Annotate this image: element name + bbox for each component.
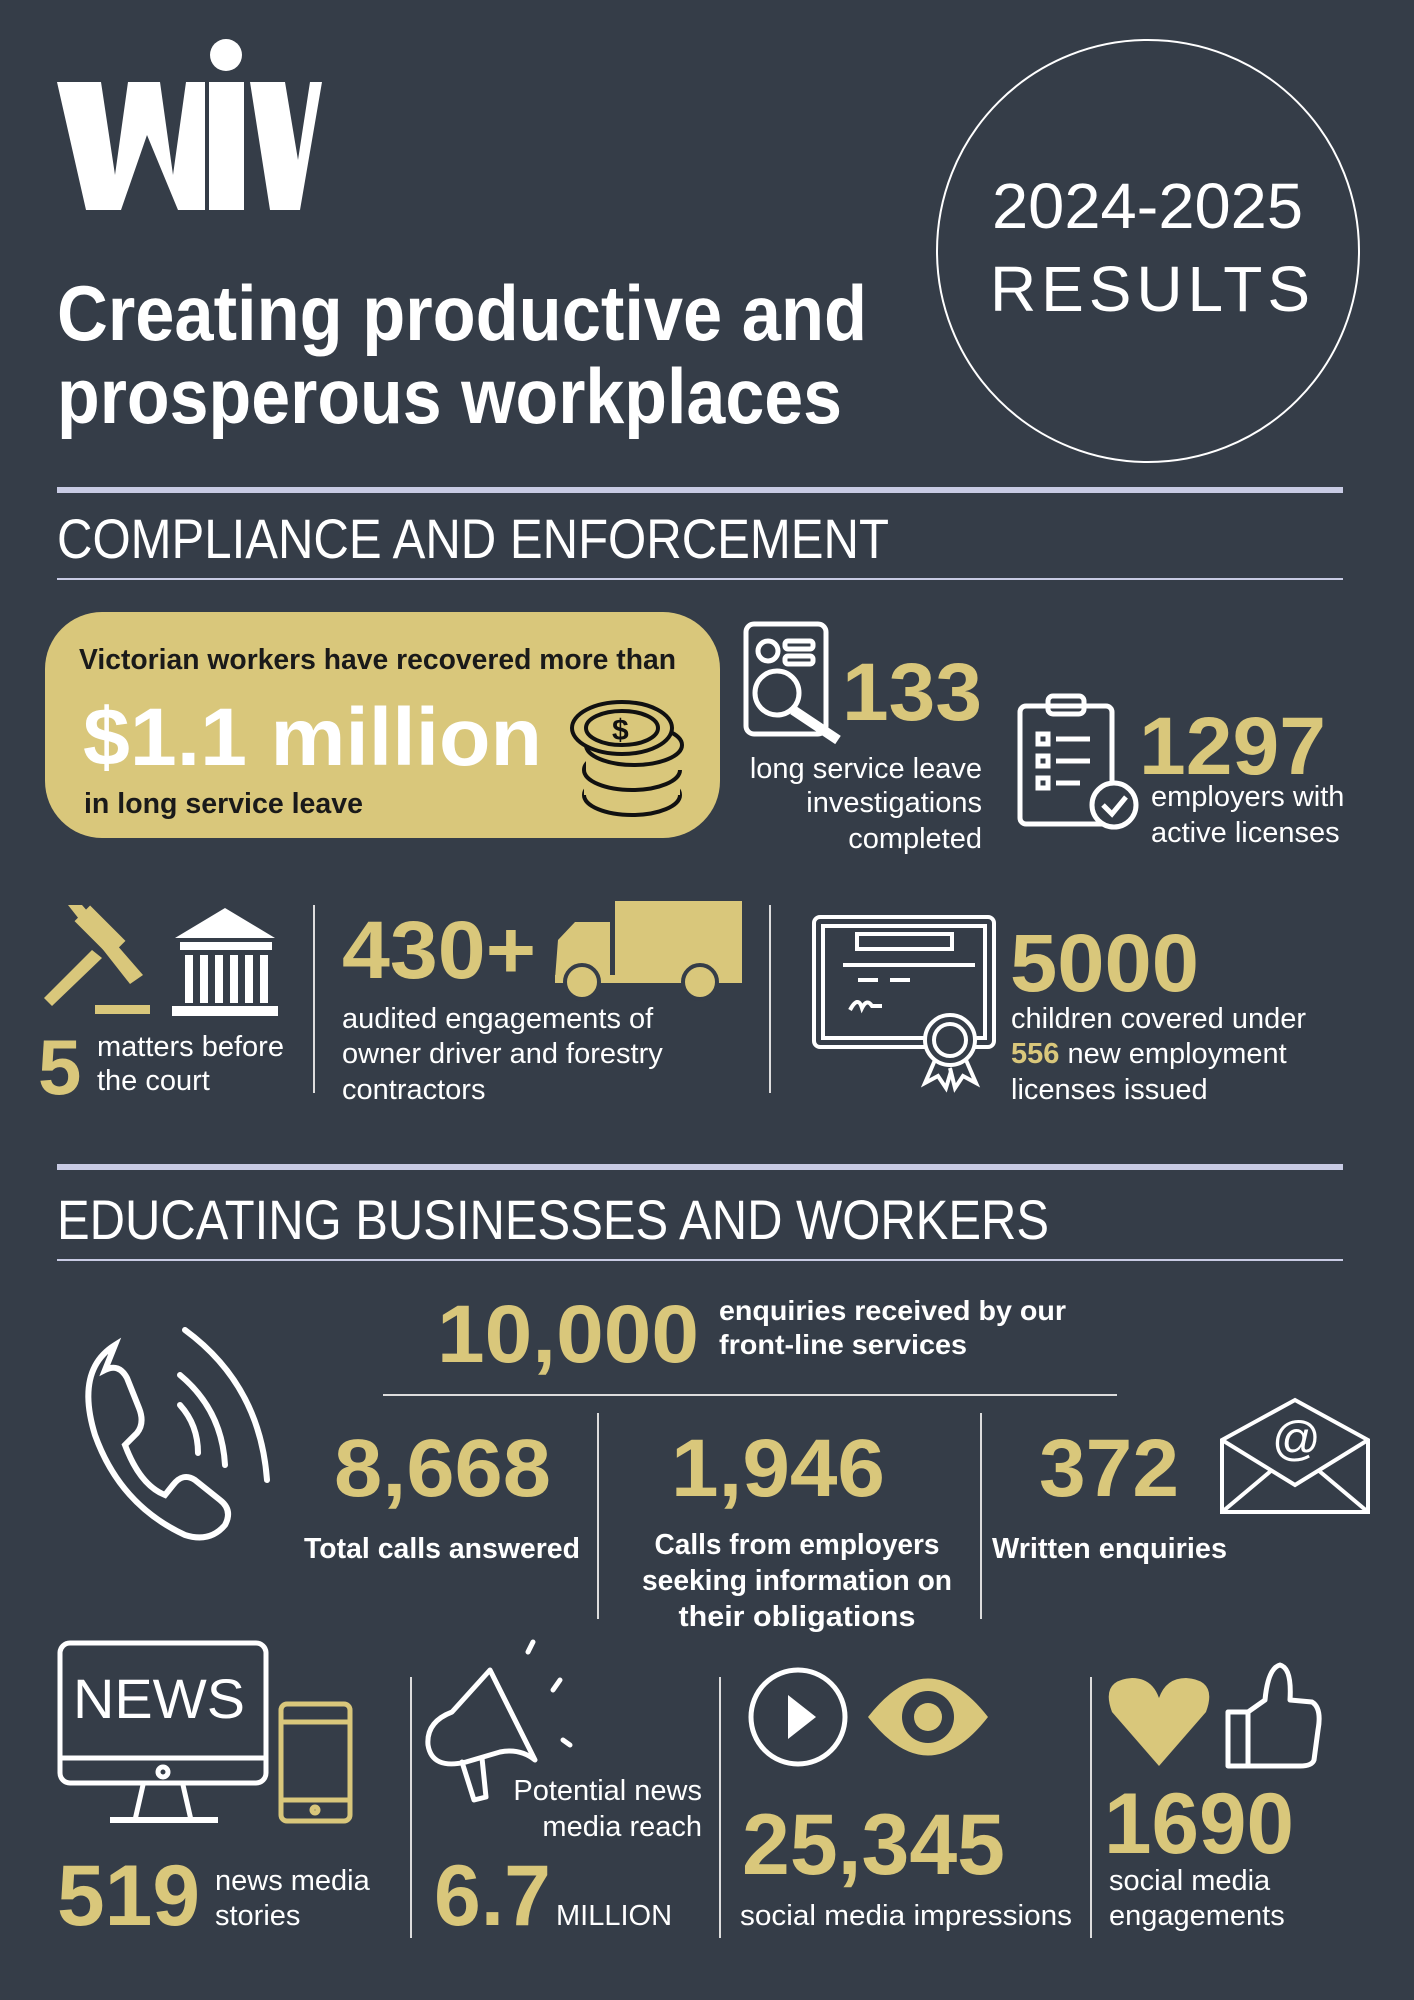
stat: 5000 children: 5000 <box>1010 918 1199 1009</box>
stat: 5000 children: licenses issued <box>1011 1074 1208 1106</box>
stat: 10,000 enquiries <box>437 1289 1066 1380</box>
stat: 133 investigations: investigations <box>806 787 982 819</box>
stat: 5 matters before court: the court <box>97 1065 210 1097</box>
stat: 133 investigations: completed <box>848 823 982 855</box>
stat: 133 investigations: long service leave <box>750 753 982 785</box>
heading: compliance and enforcement: COMPLIANCE AND ENFORCEMENT <box>57 507 889 570</box>
stat: 5000 children: children covered under <box>1011 1003 1306 1035</box>
stat: 430+ audited engagements: owner driver and forestry <box>342 1038 663 1070</box>
icon: certificate <box>814 917 994 1088</box>
year badge circle <box>937 40 1359 462</box>
icon: email envelope <box>1222 1400 1368 1512</box>
callout: $1.1 million recovered <box>45 612 720 838</box>
stat: 10,000 enquiries: 10,000 <box>437 1289 699 1380</box>
stat: 1,946 employer calls <box>642 1423 952 1633</box>
stat: 10,000 enquiries: enquiries received by our <box>719 1295 1066 1326</box>
callout: $1.1 million recovered: Victorian workers have recovered more than <box>79 644 676 676</box>
icon: gavel <box>44 905 150 1014</box>
stat: 133 investigations: 133 <box>842 647 982 738</box>
stat: 8,668 calls answered: 8,668 <box>334 1423 551 1514</box>
stat: 1297 employers: 1297 <box>1139 701 1326 792</box>
stat: 372 written enquiries: 372 <box>1039 1423 1179 1514</box>
icon: mobile phone <box>281 1704 350 1821</box>
stat: 6.7 million reach <box>428 1642 702 1944</box>
stat: 25,345 impressions: 25,345 <box>742 1797 1005 1893</box>
stat: 519 news media stories <box>57 1643 371 1944</box>
stat: 430+ audited engagements: audited engagements of <box>342 1003 654 1035</box>
heading: educating businesses and workers: EDUCATING BUSINESSES AND WORKERS <box>57 1188 1049 1251</box>
stat: 1,946 employer calls: their obligations <box>678 1601 916 1633</box>
stat: 519 news media stories: 519 <box>57 1848 200 1944</box>
stat: 5 matters before court: matters before <box>97 1031 284 1063</box>
stat: 430+ audited engagements <box>342 901 742 1106</box>
icon: magnifier document <box>746 624 838 740</box>
stat: 6.7 million reach: Potential news <box>513 1775 702 1807</box>
stat: 1,946 employer calls: 1,946 <box>671 1423 885 1514</box>
icon: thumbs up <box>1228 1665 1319 1766</box>
year badge circle: RESULTS <box>990 253 1310 325</box>
callout: $1.1 million recovered: $1.1 million <box>83 692 542 783</box>
stat: 5 matters before court: 5 <box>38 1023 81 1111</box>
stat: 5000 children <box>814 917 1306 1106</box>
stat: 1690 engagements: engagements <box>1109 1900 1285 1932</box>
stat: 1,946 employer calls: seeking information on <box>642 1565 952 1597</box>
title: Creating productive and <box>57 269 867 357</box>
title <box>57 269 867 440</box>
icon: courthouse <box>172 908 278 1016</box>
icon: truck <box>555 901 742 999</box>
icon: play button <box>751 1670 845 1764</box>
year badge circle: 2024-2025 <box>992 170 1303 242</box>
stat: 25,345 impressions <box>740 1670 1072 1932</box>
icon: clipboard <box>1020 696 1136 827</box>
stat: 519 news media stories: news media <box>215 1865 371 1897</box>
title: prosperous workplaces <box>57 352 842 440</box>
icon: megaphone <box>428 1642 570 1800</box>
stat: 5 matters before court <box>38 905 284 1111</box>
icon: heart <box>1109 1678 1209 1766</box>
icon: eye <box>868 1678 988 1756</box>
icon: coins <box>572 702 682 815</box>
logo: WV <box>57 39 322 210</box>
icon: coins: $ <box>612 714 629 747</box>
stat: 519 news media stories: stories <box>215 1900 300 1932</box>
stat: 6.7 million reach: MILLION <box>556 1900 672 1932</box>
stat: 430+ audited engagements: 430+ <box>342 905 536 996</box>
callout: $1.1 million recovered: in long service leave <box>84 788 363 820</box>
stat: 1690 engagements: 1690 <box>1104 1776 1294 1872</box>
icon: monitor with NEWS <box>60 1643 266 1820</box>
stat: 519 news media stories: NEWS <box>73 1667 245 1730</box>
stat: 1297 employers <box>1020 696 1344 849</box>
stat: 5000 children: 556 new employment <box>1011 1038 1287 1070</box>
stat: 6.7 million reach: 6.7 <box>434 1848 551 1944</box>
stat: 430+ audited engagements: contractors <box>342 1074 485 1106</box>
icon: email envelope: @ <box>1272 1413 1321 1466</box>
icon: phone <box>88 1330 267 1537</box>
stat: 1297 employers: employers with <box>1151 781 1344 813</box>
stat: 1690 engagements: social media <box>1109 1865 1271 1897</box>
stat: 1,946 employer calls: Calls from employers <box>654 1529 940 1561</box>
stat: 6.7 million reach: media reach <box>542 1811 702 1843</box>
stat: 372 written enquiries <box>992 1423 1227 1565</box>
stat: 10,000 enquiries: front-line services <box>719 1329 967 1360</box>
stat: 8,668 calls answered <box>304 1423 580 1565</box>
stat: 1297 employers: active licenses <box>1151 817 1340 849</box>
stat: 8,668 calls answered: Total calls answered <box>304 1533 580 1565</box>
stat: 1690 engagements <box>1104 1665 1319 1932</box>
stat: 133 investigations <box>746 624 982 855</box>
stat: 372 written enquiries: Written enquiries <box>992 1533 1227 1565</box>
stat: 25,345 impressions: social media impressions <box>740 1900 1072 1932</box>
